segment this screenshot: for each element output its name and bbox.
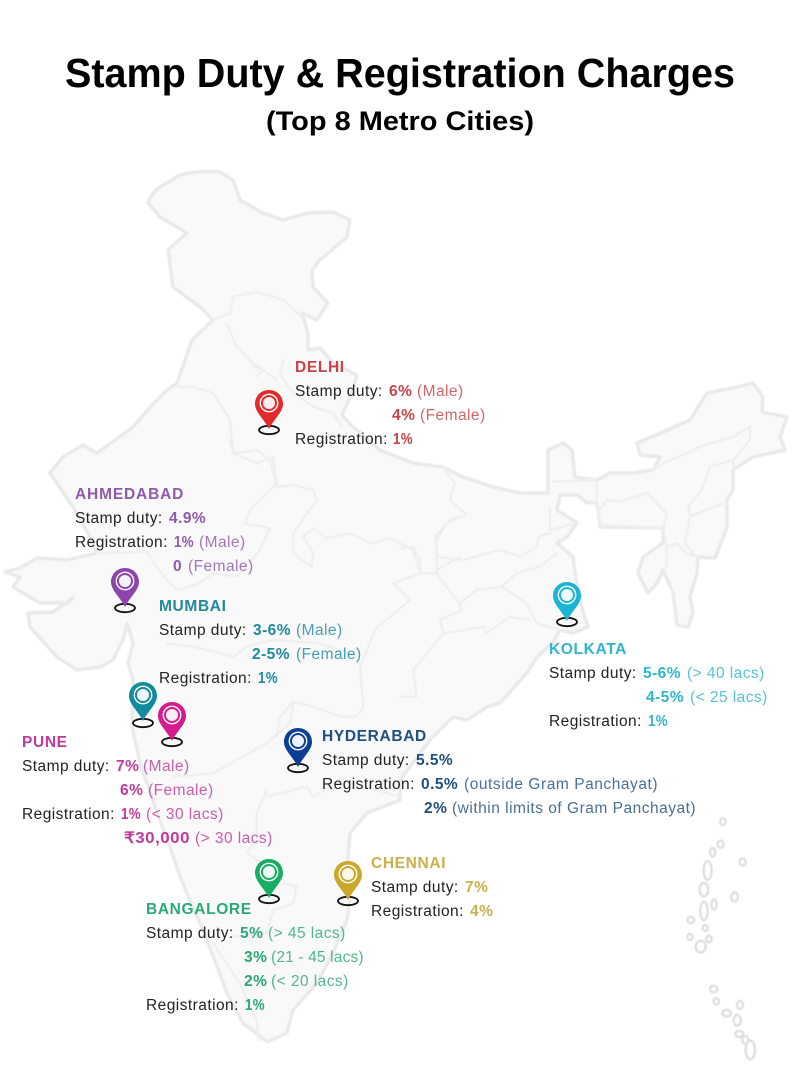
mainland outline [5, 171, 787, 1042]
southern state borders [173, 703, 400, 1040]
icon: Bangalore pin [255, 859, 283, 903]
map of India [5, 171, 787, 1059]
Bangalore text: 1% [245, 997, 265, 1014]
Mumbai text: 3-6% [253, 622, 291, 639]
Pune text: (< 30 lacs) [146, 806, 224, 823]
callout: Pune [22, 702, 273, 847]
title [65, 50, 735, 136]
Bangalore text: 3% [244, 949, 267, 966]
Chennai text: Stamp duty: [371, 879, 459, 896]
Pune text: PUNE [22, 734, 68, 751]
Mumbai text: MUMBAI [159, 598, 227, 615]
title: (Top 8 Metro Cities) [266, 106, 534, 136]
callout: Chennai [334, 855, 493, 920]
Bangalore text: Stamp duty: [146, 925, 234, 942]
Bangalore text: (21 - 45 lacs) [271, 949, 364, 966]
Mumbai text: (Female) [296, 646, 362, 663]
Ahmedabad text: (Male) [199, 534, 246, 551]
Delhi text: (Female) [420, 407, 486, 424]
Chennai text: Registration: [371, 903, 464, 920]
Bangalore text: Registration: [146, 997, 239, 1014]
Pune text [22, 734, 273, 847]
icon: Hyderabad pin [284, 728, 312, 772]
Hyderabad text: (outside Gram Panchayat) [464, 776, 658, 793]
Kolkata text [549, 641, 768, 730]
Ahmedabad text: Stamp duty: [75, 510, 163, 527]
Kolkata text: 1% [648, 713, 668, 730]
icon: Delhi pin [255, 390, 283, 434]
Pune text: 6% [120, 782, 143, 799]
Kolkata text: 4-5% [646, 689, 684, 706]
Gujarat border [97, 552, 193, 590]
callout: Kolkata [549, 582, 768, 730]
Pune text: Registration: [22, 806, 115, 823]
Hyderabad text: HYDERABAD [322, 728, 427, 745]
Ahmedabad text: 0 [173, 558, 182, 575]
Mumbai text: Stamp duty: [159, 622, 247, 639]
Ahmedabad text: 1% [174, 534, 194, 551]
Delhi text [295, 359, 486, 448]
icon: Kolkata pin [553, 582, 581, 626]
Chennai text: 4% [470, 903, 493, 920]
central state borders [167, 440, 460, 737]
Kolkata text: Stamp duty: [549, 665, 637, 682]
Ahmedabad text [75, 486, 254, 575]
Delhi text: Registration: [295, 431, 388, 448]
Ahmedabad text: Registration: [75, 534, 168, 551]
Chennai text [371, 855, 493, 920]
Kolkata text: (< 25 lacs) [690, 689, 768, 706]
Chennai text: 7% [465, 879, 488, 896]
Delhi text: 6% [389, 383, 412, 400]
callout: Ahmedabad [75, 486, 254, 612]
Pune text: (> 30 lacs) [195, 830, 273, 847]
Kolkata text: KOLKATA [549, 641, 627, 658]
Delhi text: Stamp duty: [295, 383, 383, 400]
eastern state borders [400, 427, 750, 697]
Bangalore text: 5% [240, 925, 263, 942]
Mumbai text: 2-5% [252, 646, 290, 663]
Kolkata text: Registration: [549, 713, 642, 730]
Mumbai text: 1% [258, 670, 278, 687]
Mumbai text: (Male) [296, 622, 343, 639]
Hyderabad text: 5.5% [416, 752, 453, 769]
icon: Ahmedabad pin [111, 568, 139, 612]
Pune text: 7% [116, 758, 139, 775]
Mumbai text: Registration: [159, 670, 252, 687]
icon: Chennai pin [334, 861, 362, 905]
Mumbai text [159, 598, 362, 687]
Bangalore text: 2% [244, 973, 267, 990]
Delhi text: DELHI [295, 359, 345, 376]
Pune text: 1% [121, 806, 141, 823]
Bangalore text [146, 901, 364, 1014]
Delhi text: 1% [393, 431, 413, 448]
Andaman and Lakshadweep islands [687, 818, 755, 1059]
Pune text: Stamp duty: [22, 758, 110, 775]
Delhi text: (Male) [417, 383, 464, 400]
Ahmedabad text: (Female) [188, 558, 254, 575]
Pune text: (Female) [148, 782, 214, 799]
Bangalore text: (> 45 lacs) [268, 925, 346, 942]
Ahmedabad text: 4.9% [169, 510, 206, 527]
Hyderabad text: 0.5% [421, 776, 458, 793]
Ahmedabad text: AHMEDABAD [75, 486, 184, 503]
Hyderabad text [322, 728, 696, 817]
northern state borders [177, 292, 342, 487]
Kolkata text: (> 40 lacs) [687, 665, 765, 682]
Bangalore text: (< 20 lacs) [271, 973, 349, 990]
icon: Pune pin [158, 702, 186, 746]
callout: Mumbai [129, 598, 362, 727]
Chennai text: CHENNAI [371, 855, 446, 872]
Delhi text: 4% [392, 407, 415, 424]
Hyderabad text: Registration: [322, 776, 415, 793]
title: Stamp Duty & Registration Charges [65, 50, 735, 96]
Pune text: ₹30,000 [124, 830, 190, 847]
Hyderabad text: Stamp duty: [322, 752, 410, 769]
callout: Delhi [255, 359, 486, 448]
Kolkata text: 5-6% [643, 665, 681, 682]
Hyderabad text: 2% [424, 800, 447, 817]
Hyderabad text: (within limits of Gram Panchayat) [452, 800, 696, 817]
Pune text: (Male) [143, 758, 190, 775]
Bangalore text: BANGALORE [146, 901, 252, 918]
icon: Mumbai pin [129, 682, 157, 727]
callout: Hyderabad [284, 728, 696, 817]
callout: Bangalore [146, 859, 364, 1014]
